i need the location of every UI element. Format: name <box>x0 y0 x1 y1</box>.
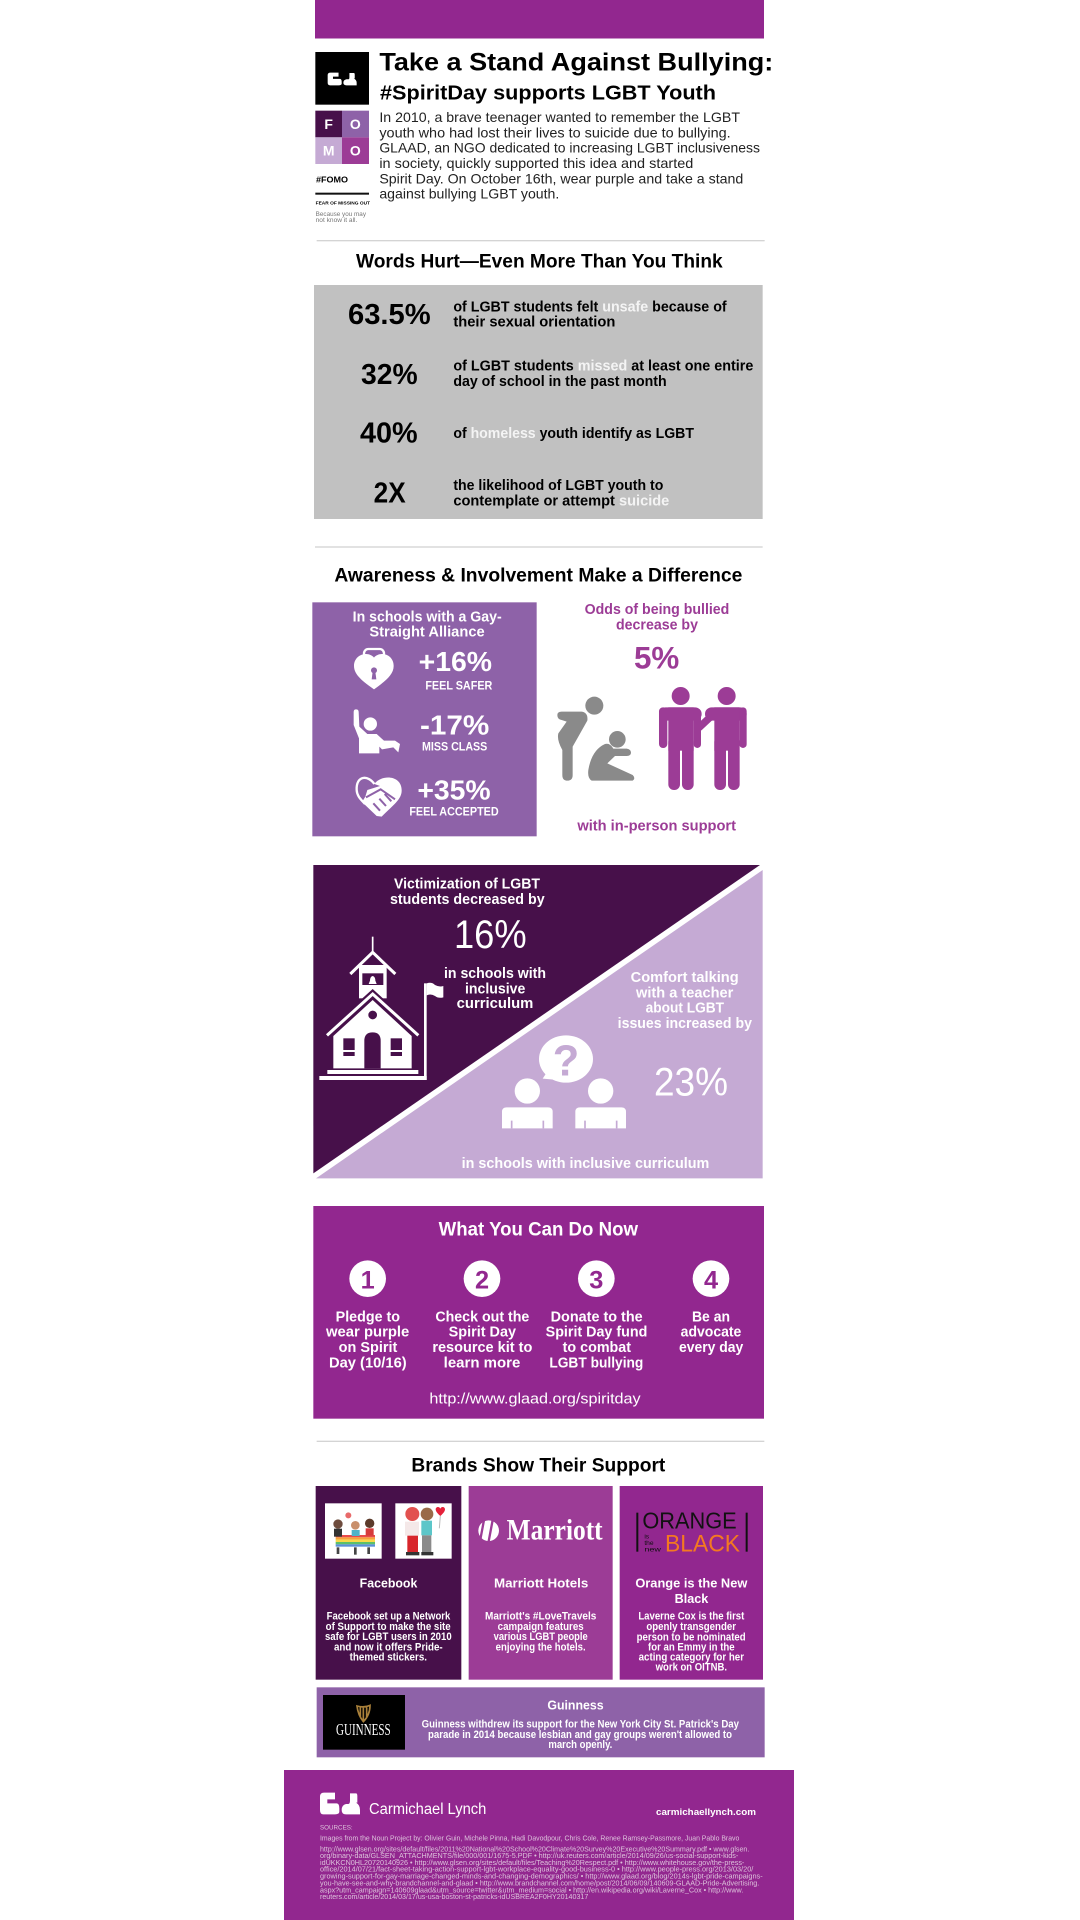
card: Marriott <box>469 1486 613 1680</box>
card: Facebook <box>316 1486 461 1680</box>
icon: heart lock <box>354 649 394 689</box>
logo: Orange is the New Black: new <box>644 1547 661 1554</box>
card: Facebook: of Support to make the site <box>326 1621 451 1633</box>
step 1: Day (10/16) <box>329 1355 407 1371</box>
light triangle: comfort talking: 23% <box>654 1060 728 1104</box>
light triangle: comfort talking <box>316 870 763 1178</box>
logo: FOMO squares: O <box>350 143 361 159</box>
logo: Marriott <box>478 1514 603 1546</box>
FOMO caption <box>315 174 370 224</box>
step 4: advocate <box>681 1325 741 1341</box>
icon: sitting figure <box>588 731 634 781</box>
intro paragraph: GLAAD, an NGO dedicated to increasing LGBT inclusiveness <box>379 140 760 156</box>
sources: Images from the Noun Project by: Olivier Guin, Michele Pinna, Hadi Davodpour, Chris Cole, Renee Ramsey-Passmore, Juan Pablo Bravo <box>320 1836 739 1843</box>
light triangle: comfort talking: issues increased by <box>618 1016 753 1032</box>
link: glaad spirit day: http://www.glaad.org/spiritday <box>429 1392 641 1408</box>
card: Orange is the New Black: Laverne Cox is the first <box>638 1611 745 1623</box>
intro paragraph: youth who had lost their lives to suicide due to bullying. <box>379 124 731 140</box>
card: Orange is the New Black: work on OITNB. <box>655 1662 727 1674</box>
section: header <box>315 49 773 272</box>
section: brand cards <box>316 1486 765 1757</box>
step 4: every day <box>679 1340 744 1356</box>
sticker: couple with balloon <box>395 1503 452 1559</box>
stat: 40% <box>360 418 694 450</box>
stat: 32%: day of school in the past month <box>453 374 667 390</box>
section: gay-straight alliance and odds <box>312 602 747 836</box>
step 3 <box>546 1260 647 1371</box>
light triangle: comfort talking: in schools with inclusive curriculum <box>462 1156 709 1172</box>
stat: 32%: 32% <box>361 359 418 391</box>
FOMO caption: #FOMO <box>316 174 348 184</box>
dark triangle: victimization: 16% <box>454 913 527 957</box>
light triangle: comfort talking: Comfort talking <box>631 970 739 986</box>
icon: schoolhouse <box>319 937 443 1080</box>
dark triangle: victimization: students decreased by <box>390 892 545 908</box>
logo: Guinness <box>323 1695 405 1750</box>
card: Orange is the New Black: person to be nominated <box>637 1631 746 1643</box>
stat: 63.5%: 63.5% <box>348 299 431 331</box>
dark triangle: victimization <box>313 865 760 1173</box>
panel: odds of being bullied: decrease by <box>616 617 699 633</box>
step 1: wear purple <box>325 1325 409 1341</box>
intro paragraph: in society, quickly supported this idea and started <box>379 155 693 171</box>
step 2: resource kit to <box>432 1340 532 1356</box>
light triangle: comfort talking: with a teacher <box>635 985 734 1001</box>
stat: +35%: +35% <box>417 774 491 805</box>
sources <box>320 1824 763 1901</box>
icon: bending figure <box>557 697 603 781</box>
card: Marriott: various LGBT people <box>494 1631 588 1643</box>
card: Guinness: march openly. <box>548 1739 612 1751</box>
card: Guinness: parade in 2014 because lesbian and gay groups weren't allowed to <box>428 1729 732 1741</box>
light triangle: comfort talking: about LGBT <box>646 1001 724 1017</box>
panel: inclusive curriculum diagonal <box>313 865 763 1178</box>
dark triangle: victimization: Victimization of LGBT <box>394 877 540 893</box>
logo: Orange is the New Black: is <box>644 1533 650 1540</box>
dark triangle: victimization: in schools with <box>444 966 546 982</box>
icon: two people with question bubble <box>502 1035 626 1128</box>
stat: -17%: -17% <box>420 710 489 741</box>
step 1 <box>325 1260 409 1371</box>
step 1: Pledge to <box>336 1309 400 1325</box>
heading: words hurt: Words Hurt—Even More Than You Think <box>356 251 723 272</box>
step 3: to combat <box>563 1340 631 1356</box>
FOMO caption: Because you may <box>316 212 366 218</box>
stat: 40%: 40% <box>360 418 418 450</box>
stat: 63.5%: their sexual orientation <box>453 315 615 331</box>
sources: idUKKCN0HL20720140926 • http://www.glsen.org/sites/default/files/Teaching%20Respect.pdf • http://www.whitehouse.gov/the-press- <box>320 1860 745 1867</box>
stat: 2X: 2X <box>374 478 406 510</box>
stat: +16%: +16% <box>419 646 492 677</box>
heading: awareness: Awareness & Involvement Make a Difference <box>334 565 743 586</box>
logo: Carmichael Lynch black square <box>315 52 369 105</box>
step 3: 3 <box>589 1267 603 1295</box>
panel background <box>314 285 763 519</box>
icon: two people with question bubble: ? <box>553 1037 579 1085</box>
intro paragraph: In 2010, a brave teenager wanted to remember the LGBT <box>379 109 740 125</box>
step 4: Be an <box>692 1309 730 1325</box>
logo: Guinness: GUINNESS <box>336 1720 391 1739</box>
card: Orange is the New Black: for an Emmy in the <box>648 1641 735 1653</box>
sources: http://www.glsen.org/sites/default/files/2011%20National%20School%20Climate%20Survey%20Executive%20Summary.pdf • www.glsen. <box>320 1846 749 1853</box>
card: Guinness: Guinness <box>547 1697 604 1712</box>
card: Facebook: safe for LGBT users in 2010 <box>325 1631 452 1643</box>
intro paragraph <box>379 109 760 202</box>
step 2: learn more <box>444 1355 520 1371</box>
step 2 <box>432 1260 532 1371</box>
logo: FOMO squares: M <box>323 143 334 159</box>
panel: gay-straight alliance <box>312 602 537 836</box>
stat: 2X: the likelihood of LGBT youth to <box>453 478 663 494</box>
step 3: Spirit Day fund <box>546 1325 647 1341</box>
sources: you-have-see-and-why-brandchannel-and-glaad • http://www.brandchannel.com/home/post/2014/06/09/140609-GLAAD-Pride-Advertising. <box>320 1880 759 1887</box>
sources: SOURCES: <box>320 1824 353 1831</box>
logo: Marriott: Marriott <box>507 1514 603 1546</box>
sources: aspx?utm_campaign=140609glaad&utm_source=twitter&utm_medium=social • http://en.wikipedia.org/wiki/Laverne_Cox • http://www. <box>320 1887 743 1894</box>
card: Facebook: and now it offers Pride- <box>334 1641 443 1653</box>
card: Orange is the New Black: acting category for her <box>639 1652 744 1664</box>
stat: 40%: of homeless youth identify as LGBT <box>453 426 694 442</box>
logo: Carmichael Lynch: Carmichael Lynch <box>369 1801 486 1818</box>
step 4: 4 <box>704 1267 718 1295</box>
panel: statistics <box>314 285 763 586</box>
card: Guinness <box>317 1687 765 1757</box>
footer <box>284 1770 794 1920</box>
icon: handshake heart <box>357 777 402 817</box>
card: Facebook: Facebook <box>360 1575 418 1590</box>
stat: 32% <box>361 359 753 391</box>
panel: what you can do now <box>313 1206 764 1476</box>
panel: gay-straight alliance: In schools with a Gay- <box>353 609 502 625</box>
card: Orange is the New Black: openly transgender <box>646 1621 736 1633</box>
stat: +16% <box>419 646 493 692</box>
FOMO caption: not know it all. <box>316 218 358 224</box>
card: Marriott: enjoying the hotels. <box>496 1641 586 1653</box>
sources: office/2014/07/21/fact-sheet-taking-action-support-lgbt-workplace-equality-good-business-0 • http://www.people-press.org/2013/03/20/ <box>320 1867 753 1874</box>
sources: growing-support-for-gay-marriage-changed-minds-and-changing-demographics/ • http://www.glaad.org/blog/2014s-lgbt-pride-campaigns- <box>320 1874 763 1881</box>
logo: Orange is the New Black: BLACK <box>665 1531 740 1558</box>
card: Facebook: themed stickers. <box>350 1651 427 1663</box>
stat: 32%: of LGBT students missed at least one entire <box>453 359 753 375</box>
step 2: 2 <box>475 1267 489 1295</box>
stat: -17% <box>420 710 489 754</box>
step 1: 1 <box>361 1267 375 1295</box>
card: Guinness: Guinness withdrew its support for the New York City St. Patrick's Day <box>422 1719 739 1731</box>
panel: odds of being bullied: with in-person support <box>576 819 736 835</box>
subtitle: #SpiritDay supports LGBT Youth <box>380 82 716 104</box>
icon: raised hand <box>354 709 400 753</box>
stat: +35%: FEEL ACCEPTED <box>409 805 499 819</box>
panel: odds of being bullied <box>557 602 747 835</box>
card: Orange is the New Black: Black <box>675 1591 709 1606</box>
card: Facebook: Facebook set up a Network <box>327 1611 450 1623</box>
stat: 2X <box>374 478 669 510</box>
logo: Carmichael Lynch <box>320 1793 486 1818</box>
card: Orange is the New Black <box>620 1486 763 1680</box>
stat: 2X: contemplate or attempt suicide <box>453 493 669 509</box>
step 2: Spirit Day <box>449 1325 517 1341</box>
stat: 63.5%: of LGBT students felt unsafe because of <box>453 299 727 315</box>
dark triangle: victimization: curriculum <box>457 996 533 1012</box>
logo: FOMO squares: F <box>324 116 333 132</box>
stat: +35% <box>409 774 499 819</box>
icon: two supportive people <box>659 687 747 790</box>
logo: FOMO squares: O <box>350 116 361 132</box>
card: Marriott: Marriott Hotels <box>494 1575 588 1590</box>
FOMO caption: FEAR OF MISSING OUT <box>316 200 370 205</box>
step 4 <box>679 1260 744 1356</box>
sticker: rainbow parade <box>325 1503 382 1559</box>
card: Marriott: Marriott's #LoveTravels <box>485 1611 596 1623</box>
logo: FOMO squares <box>315 111 369 164</box>
logo: Orange is the New Black: ORANGE <box>642 1508 737 1534</box>
intro paragraph: against bullying LGBT youth. <box>379 186 559 202</box>
panel: odds of being bullied: Odds of being bullied <box>585 602 729 618</box>
stat: 63.5% <box>348 299 727 331</box>
step 2: Check out the <box>435 1309 529 1325</box>
title: Take a Stand Against Bullying: <box>379 49 773 77</box>
step 3: LGBT bullying <box>549 1355 643 1371</box>
top purple banner <box>315 0 764 38</box>
dark triangle: victimization: inclusive <box>465 981 525 997</box>
intro paragraph: Spirit Day. On October 16th, wear purple and take a stand <box>379 170 743 186</box>
card: Marriott: campaign features <box>498 1621 584 1633</box>
logo: Orange is the New Black <box>636 1508 748 1558</box>
sources: org/binary-data/GLSEN_ATTACHMENTS/file/000/001/1675-5.PDF • http://uk.reuters.com/article/2014/09/26/us-social-support-kids- <box>320 1853 739 1860</box>
sources: reuters.com/article/2014/03/17/us-usa-boston-st-patricks-idUSBREA2F0HY20140317 <box>320 1894 588 1901</box>
heading: what you can do now: What You Can Do Now <box>439 1219 639 1240</box>
website: carmichaellynch.com <box>656 1807 756 1817</box>
step 1: on Spirit <box>339 1340 397 1356</box>
heading: brands: Brands Show Their Support <box>411 1455 666 1476</box>
stat: -17%: MISS CLASS <box>422 740 487 754</box>
stat: +16%: FEEL SAFER <box>425 678 493 692</box>
logo: Orange is the New Black: the <box>644 1540 654 1547</box>
panel: odds of being bullied: 5% <box>634 641 679 676</box>
card: Orange is the New Black: Orange is the New <box>635 1576 748 1591</box>
step 3: Donate to the <box>551 1309 643 1325</box>
panel: gay-straight alliance: Straight Alliance <box>369 624 485 640</box>
